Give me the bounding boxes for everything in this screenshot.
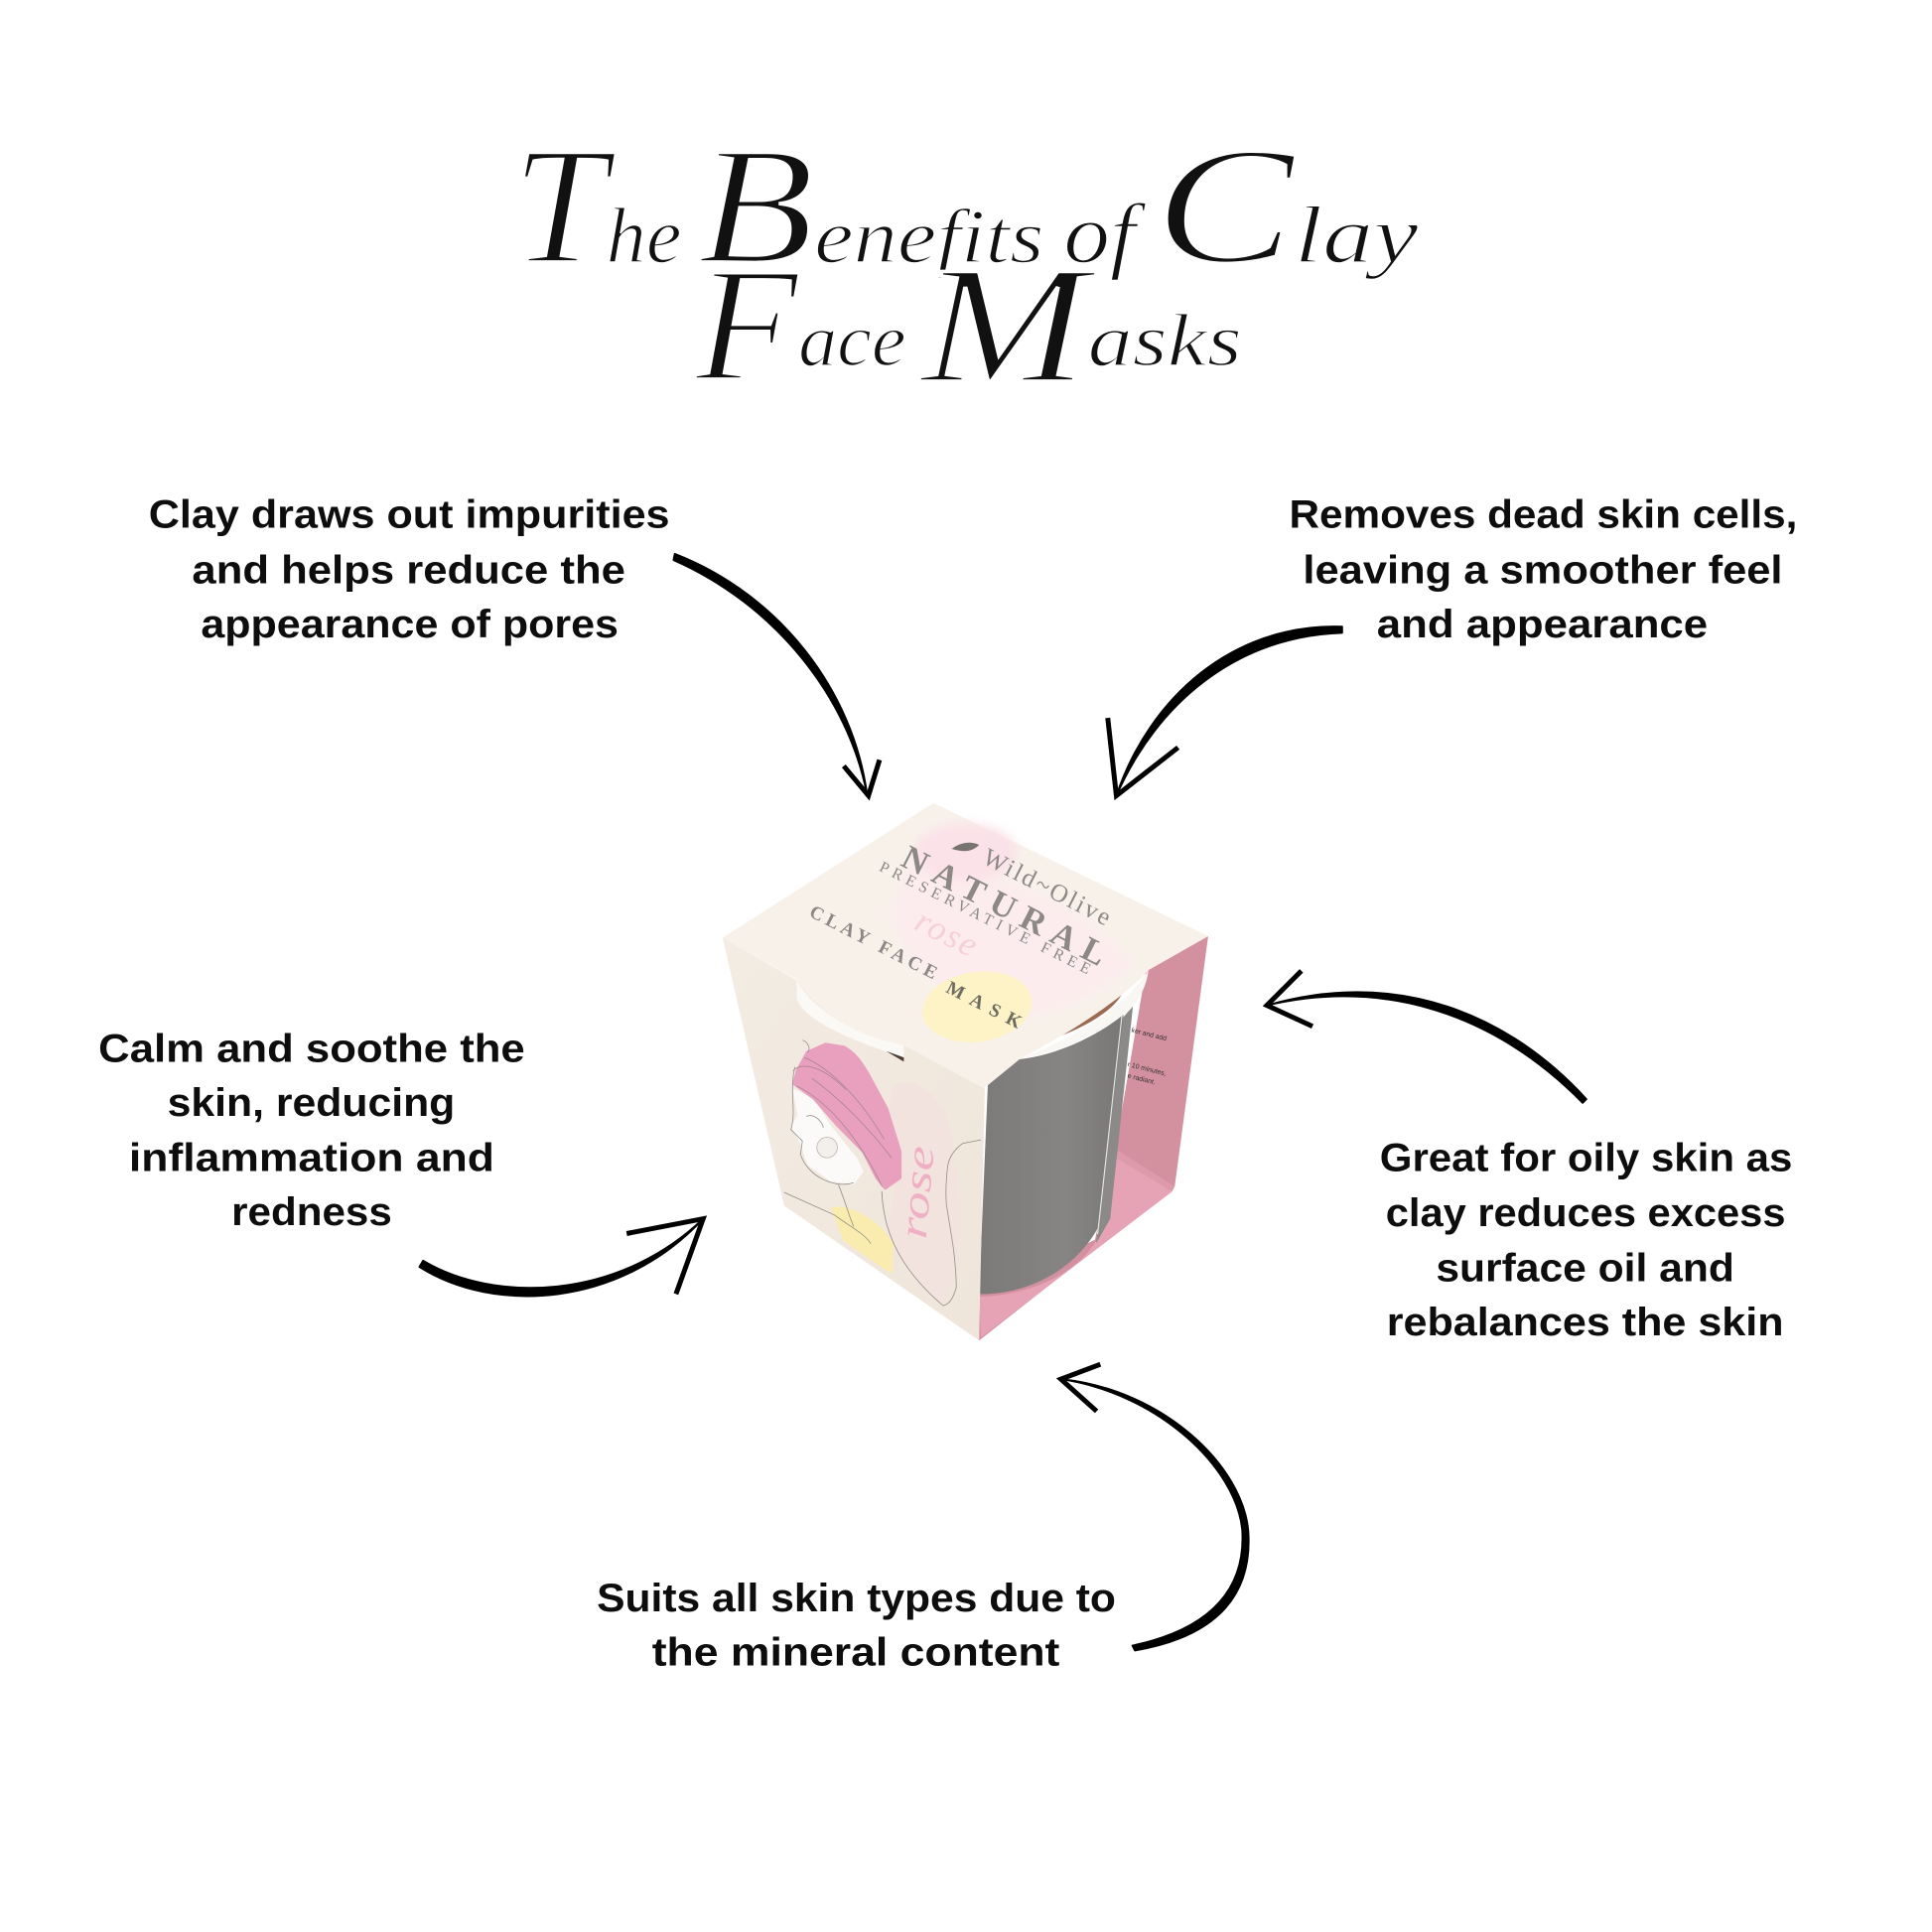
- text block: oily skin: Great for oily skin as: [1380, 1136, 1792, 1179]
- text block: dead skin cells: [1290, 493, 1797, 646]
- rose script on side: rose: [891, 1144, 943, 1241]
- lid rim, left: [796, 980, 903, 1061]
- text block: all skin types: [597, 1577, 1116, 1674]
- text block: dead skin cells: Removes dead skin cells,: [1290, 493, 1797, 537]
- title: C lay: [1155, 114, 1420, 299]
- title: M: [918, 233, 1098, 418]
- instruction text on inner panel: e radiant.: [1127, 1073, 1157, 1086]
- left face of sleeve: [723, 938, 985, 1340]
- top flap of sleeve: [723, 803, 1208, 1088]
- instruction text on inner panel: ker and add: [1131, 1028, 1168, 1042]
- text block: all skin types: Suits all skin types due to: [597, 1577, 1116, 1620]
- arrow: impurities to product: [673, 554, 880, 795]
- title: asks: [1088, 300, 1242, 382]
- text block: oily skin: surface oil and: [1436, 1247, 1734, 1291]
- title: F: [694, 235, 800, 415]
- leaf logo: [952, 843, 979, 851]
- text block: impurities: appearance of pores: [201, 603, 619, 646]
- arrow: all skin types to product: [1061, 1364, 1249, 1650]
- text block: calm and soothe: skin, reducing: [168, 1081, 455, 1125]
- text block: oily skin: rebalances the skin: [1387, 1301, 1784, 1344]
- text block: calm and soothe: Calm and soothe the: [98, 1027, 525, 1070]
- text block: dead skin cells: and appearance: [1377, 603, 1708, 646]
- text block: impurities: Clay draws out impurities: [149, 493, 670, 537]
- label text: CLAY FACE: [806, 901, 940, 984]
- instruction text on inner panel: [1127, 1028, 1168, 1086]
- title: of: [1063, 188, 1147, 281]
- grey cup: [979, 1006, 1133, 1295]
- title: Benefits: [697, 114, 1044, 299]
- title: [512, 114, 1420, 418]
- product photo: clay mask box: [723, 803, 1208, 1340]
- text block: impurities: [149, 493, 670, 646]
- instruction text on inner panel: r 10 minutes,: [1127, 1061, 1167, 1077]
- text block: calm and soothe: [98, 1027, 525, 1234]
- text block: oily skin: clay reduces excess: [1386, 1191, 1785, 1235]
- text block: oily skin: [1380, 1136, 1792, 1344]
- pink blob on side panel: [887, 1082, 960, 1306]
- illustrated woman: [784, 1040, 981, 1306]
- arrow: calm and soothe to product: [419, 1219, 703, 1297]
- text block: calm and soothe: redness: [231, 1190, 392, 1234]
- title: The: [512, 114, 681, 299]
- text block: calm and soothe: inflammation and: [129, 1136, 494, 1179]
- yellow circle on side panel: [831, 1206, 894, 1274]
- yellow label circle: [917, 965, 1036, 1049]
- arrow: oily skin to product: [1267, 971, 1587, 1103]
- pink wash: [895, 858, 1135, 1017]
- arrow: dead skin cells to product: [1108, 626, 1342, 795]
- label text: rose: [909, 900, 984, 965]
- label text: Wild~Olive: [978, 843, 1116, 931]
- label text: MASK: [942, 978, 1025, 1034]
- title: ace: [798, 300, 906, 382]
- lid rim, right: [1010, 970, 1149, 1067]
- text block: dead skin cells: leaving a smoother feel: [1303, 548, 1783, 592]
- text block: impurities: and helps reduce the: [192, 548, 625, 592]
- label text: PRESERVATIVE FREE: [877, 859, 1093, 978]
- pink inner panel and floor: [979, 936, 1208, 1340]
- blush pink patch: [914, 824, 1017, 881]
- label text: NATURAL: [896, 838, 1113, 974]
- label text: [806, 838, 1116, 1034]
- text block: all skin types: the mineral content: [652, 1630, 1059, 1674]
